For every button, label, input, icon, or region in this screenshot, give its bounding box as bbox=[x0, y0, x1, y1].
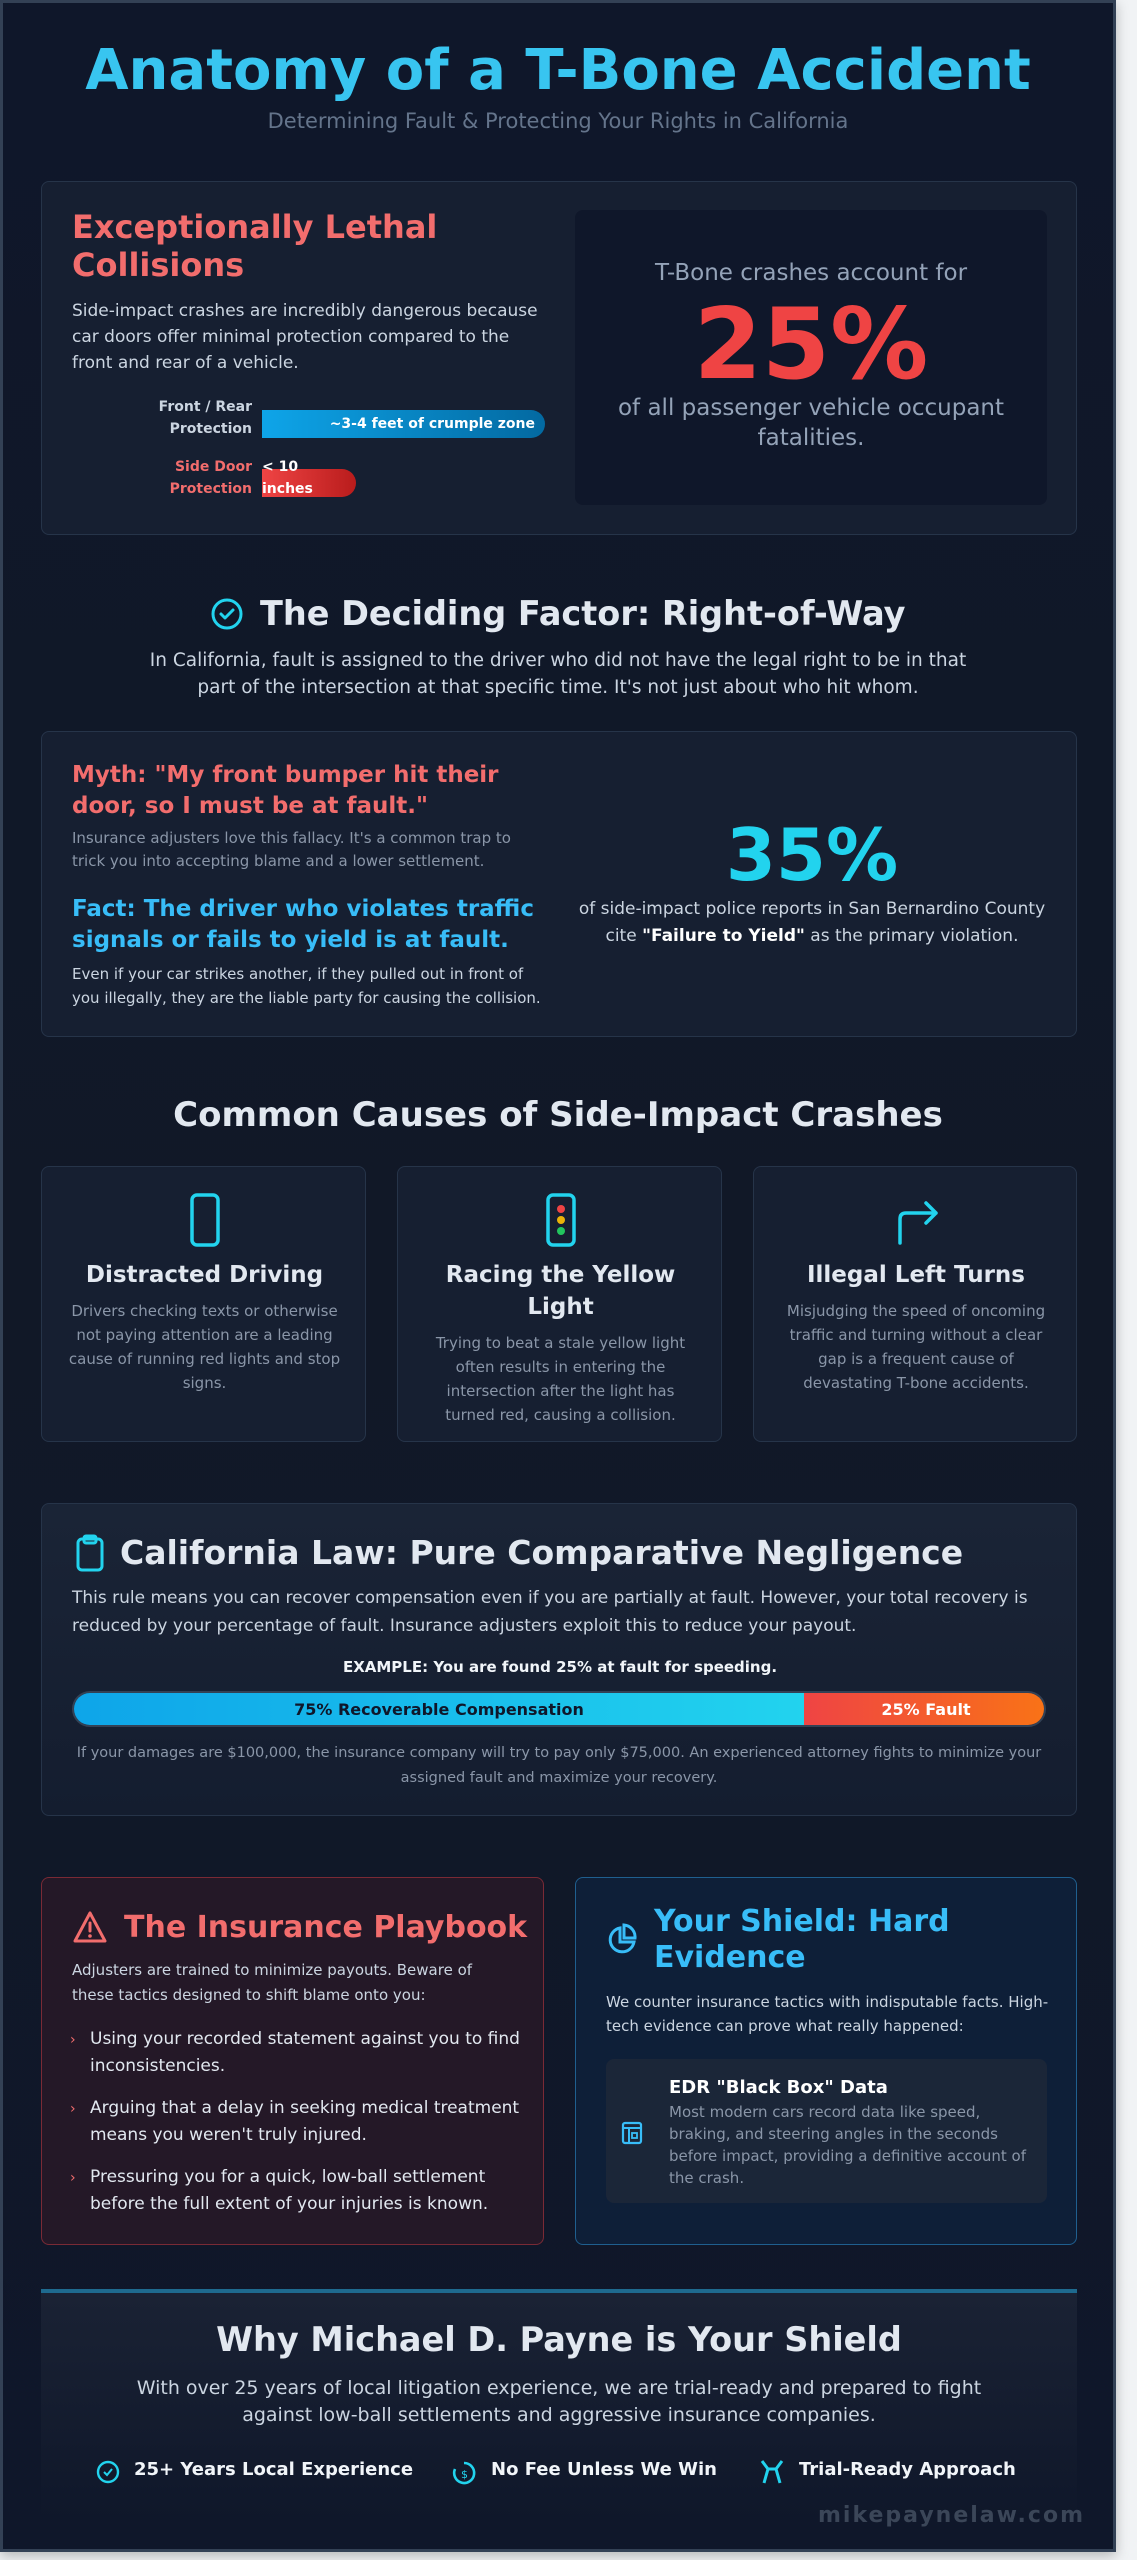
icon: warning bbox=[74, 1911, 106, 1942]
card: left turns: Misjudging the speed of oncoming traffic and turning without a clear gap is a frequent cause of devastating T-bone accidents. bbox=[787, 1302, 1045, 1392]
text block: experience: With over 25 years of local litigation experience, we are trial-ready and prepared to fight against low-ball settlements and aggressive insurance companies. bbox=[137, 2377, 981, 2426]
feature: no fee bbox=[452, 2459, 717, 2484]
bar chart: protection bbox=[159, 399, 545, 497]
subtitle: Determining Fault & Protecting Your Rights in California bbox=[268, 109, 848, 133]
card: distracted driving bbox=[41, 1166, 366, 1442]
example label: EXAMPLE: You are found 25% at fault for speeding. bbox=[343, 1658, 777, 1676]
label: side door bbox=[170, 459, 252, 497]
panel: myth vs fact bbox=[41, 731, 1077, 1037]
bar: side door: inches bbox=[262, 481, 313, 497]
label: front/rear: Front / Rear bbox=[159, 399, 252, 415]
list: tactics: › bbox=[70, 2170, 76, 2186]
stat box: 25%: of all passenger vehicle occupant fatalities. bbox=[618, 395, 1004, 451]
label: side door: Side Door bbox=[175, 459, 252, 475]
card: distracted driving: Distracted Driving bbox=[86, 1262, 323, 1288]
stat: 35%: 35% bbox=[726, 813, 898, 897]
stat box: 25%: 25% bbox=[694, 288, 928, 402]
list: tactics: Arguing that a delay in seeking medical treatment means you weren't truly injured. bbox=[90, 2098, 519, 2145]
fact text: Even if your car strikes another, if they pulled out in front of you illegally, they are the liable party for causing the collision. bbox=[72, 965, 541, 1007]
bar: side door: < 10 bbox=[262, 459, 298, 475]
icon: phone bbox=[190, 1193, 220, 1247]
footnote: If your damages are $100,000, the insurance company will try to pay only $75,000. An experienced attorney fights to minimize your assigned fault and maximize your recovery. bbox=[77, 1745, 1041, 1786]
fact heading: Fact: The driver who violates traffic signals or fails to yield is at fault. bbox=[72, 896, 534, 953]
icon: clipboard bbox=[76, 1534, 104, 1572]
stat: 35%: of side-impact police reports in San Bernardino County cite "Failure to Yield" as the primary violation. bbox=[579, 899, 1045, 946]
list: tactics bbox=[70, 2029, 520, 2214]
bar: front/rear bbox=[262, 410, 545, 438]
feature: experience bbox=[96, 2459, 413, 2484]
icon: turn arrow bbox=[898, 1201, 938, 1245]
myth heading: Myth: "My front bumper hit their door, so I must be at fault." bbox=[72, 762, 499, 819]
heading: california law: California Law: Pure Comparative Negligence bbox=[120, 1533, 963, 1572]
text block: evidence intro: We counter insurance tactics with indisputable facts. High-tech evidence can prove what really happened: bbox=[606, 1993, 1048, 2035]
features row: No Fee Unless We Win bbox=[491, 2459, 717, 2480]
text block: negligence: This rule means you can recover compensation even if you are partially at fault. However, your total recovery is reduced by your percentage of fault. Insurance adjusters exploit this to reduce your payout. bbox=[72, 1588, 1028, 1636]
features row: Trial-Ready Approach bbox=[799, 2459, 1016, 2480]
stat: 35% bbox=[579, 813, 1045, 946]
label: front/rear bbox=[159, 399, 252, 437]
heading: shield: Why Michael D. Payne is Your Shield bbox=[216, 2320, 902, 2359]
bar chart: compensation split: 75% Recoverable Compensation bbox=[294, 1700, 584, 1719]
bar chart: compensation split bbox=[72, 1691, 1046, 1727]
features row bbox=[96, 2459, 1016, 2484]
bar chart: compensation split: 25% Fault bbox=[881, 1700, 971, 1719]
bar: front/rear: ~3-4 feet of crumple zone bbox=[330, 416, 535, 432]
list: tactics: › bbox=[70, 2032, 76, 2048]
panel: why michael payne bbox=[41, 2289, 1077, 2521]
icon: traffic light bbox=[546, 1193, 576, 1247]
stat box: 25% bbox=[575, 210, 1047, 505]
icon: check circle bbox=[212, 598, 242, 630]
card: distracted driving: Drivers checking texts or otherwise not paying attention are a leading cause of running red lights and stop signs. bbox=[69, 1302, 340, 1392]
heading: common causes: Common Causes of Side-Impact Crashes bbox=[173, 1095, 943, 1135]
feature: trial ready bbox=[760, 2459, 1016, 2484]
label: front/rear: Protection bbox=[170, 421, 252, 437]
panel: comparative negligence bbox=[41, 1503, 1077, 1816]
panel: insurance playbook bbox=[41, 1877, 544, 2245]
card: yellow light: Trying to beat a stale yellow light often results in entering the intersection after the light has turned red, causing a collision. bbox=[436, 1334, 685, 1424]
heading: deciding factor: The Deciding Factor: Right-of-Way bbox=[260, 594, 906, 633]
myth text: Insurance adjusters love this fallacy. It's a common trap to trick you into accepting blame and a lower settlement. bbox=[72, 829, 511, 870]
card: EDR: EDR "Black Box" Data bbox=[669, 2077, 888, 2098]
list: tactics: Using your recorded statement against you to find inconsistencies. bbox=[90, 2029, 520, 2076]
panel: hard evidence bbox=[575, 1877, 1077, 2245]
text block: right-of-way: In California, fault is assigned to the driver who did not have the legal right to be in that part of the intersection at that specific time. It's not just about who hit whom. bbox=[150, 650, 966, 698]
card: EDR: Most modern cars record data like speed, braking, and steering angles in the seconds before impact, providing a definitive account of the crash. bbox=[669, 2103, 1026, 2187]
text block: lethal description: Side-impact crashes are incredibly dangerous because car doors offer minimal protection compared to the front and rear of a vehicle. bbox=[72, 301, 538, 373]
heading: shield: Your Shield: Hard Evidence bbox=[654, 1904, 950, 1975]
list: tactics: Pressuring you for a quick, low-ball settlement before the full extent of your injuries is known. bbox=[90, 2167, 488, 2214]
bar: side door bbox=[262, 459, 356, 497]
text block: playbook intro: Adjusters are trained to minimize payouts. Beware of these tactics designed to shift blame onto you: bbox=[72, 1961, 472, 2004]
label: side door: Protection bbox=[170, 481, 252, 497]
card: left turns: Illegal Left Turns bbox=[807, 1262, 1025, 1288]
panel: lethal collisions bbox=[41, 181, 1077, 535]
heading: lethal: Exceptionally Lethal Collisions bbox=[72, 208, 437, 284]
heading: playbook: The Insurance Playbook bbox=[124, 1910, 527, 1945]
icon: black box bbox=[622, 2122, 642, 2144]
title: Anatomy of a T-Bone Accident bbox=[85, 38, 1031, 103]
list: tactics: › bbox=[70, 2101, 76, 2117]
card: left turns bbox=[753, 1166, 1077, 1442]
watermark: mikepaynelaw.com bbox=[818, 2503, 1085, 2528]
card: yellow light bbox=[397, 1166, 722, 1442]
card: EDR bbox=[606, 2059, 1047, 2203]
features row: 25+ Years Local Experience bbox=[134, 2459, 413, 2480]
stat box: 25%: T-Bone crashes account for bbox=[655, 260, 967, 286]
features row: $ bbox=[461, 2468, 468, 2481]
card: yellow light: Racing the Yellow Light bbox=[446, 1262, 675, 1320]
icon: pie bbox=[608, 1923, 637, 1954]
